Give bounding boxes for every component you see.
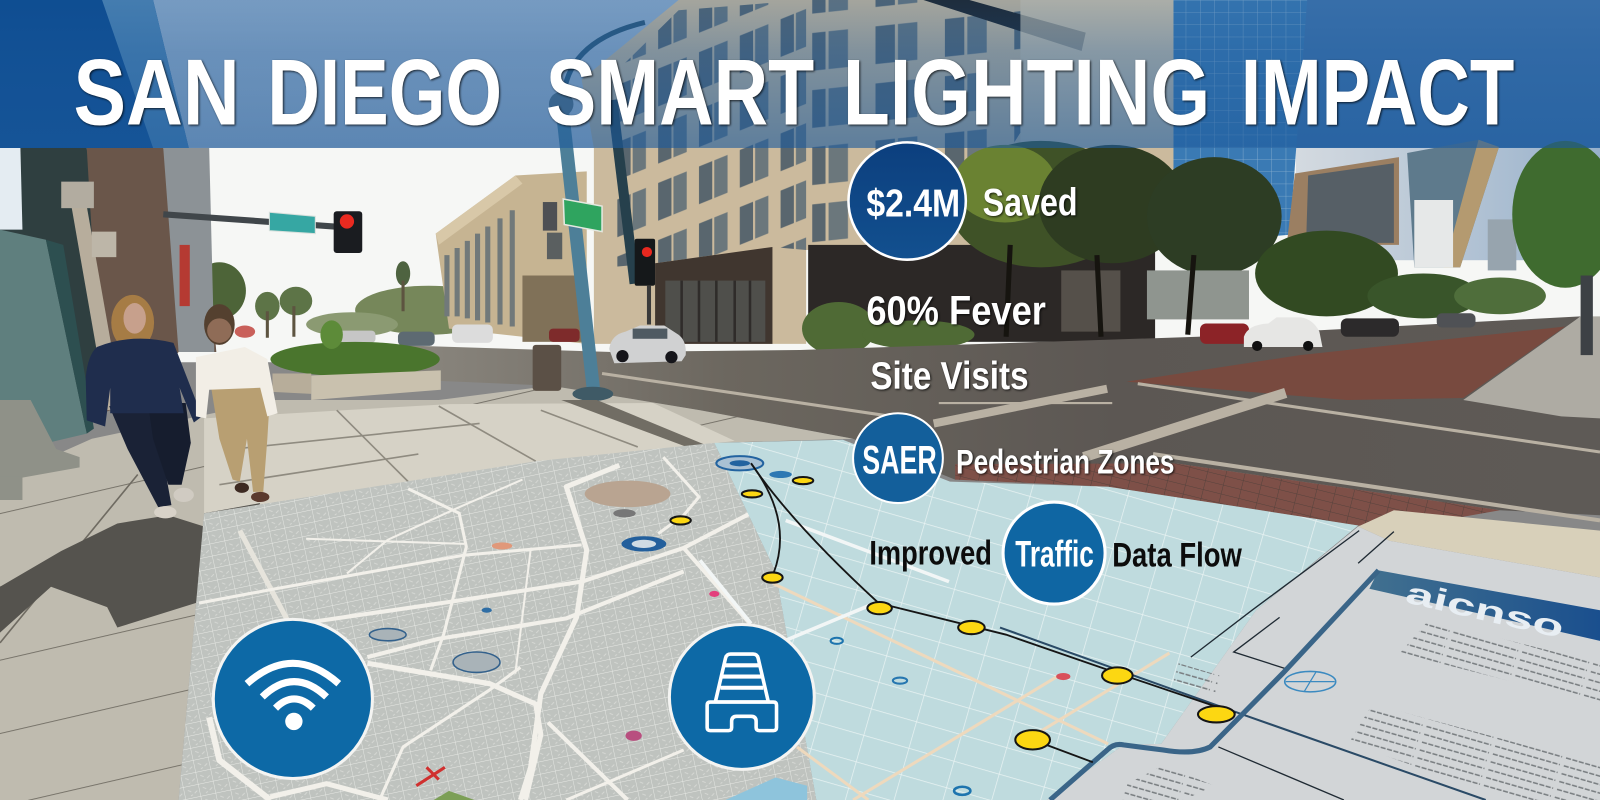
sensor network route xyxy=(751,463,1236,762)
yellow route markers xyxy=(670,477,1235,749)
stat: pedestrian zones: SAER xyxy=(862,438,937,482)
title: SAN xyxy=(73,39,240,144)
stat: improved traffic data flow: Data Flow xyxy=(1112,536,1243,574)
column base at left xyxy=(0,400,80,500)
brick crossing lower xyxy=(955,463,1500,527)
stat: pedestrian zones xyxy=(853,413,1174,503)
stat: site visits: Site Visits xyxy=(870,355,1029,398)
brick crossing upper xyxy=(1127,327,1565,400)
woman in white top xyxy=(196,304,278,502)
distant cars xyxy=(339,324,580,346)
street map: teal district xyxy=(700,440,1358,800)
glass tower xyxy=(1162,0,1307,245)
title: IMPACT xyxy=(1241,39,1514,144)
hub marker xyxy=(716,456,792,478)
pavement xyxy=(0,386,853,800)
title: SMART xyxy=(546,39,814,144)
dark signal pole xyxy=(612,100,635,284)
street trees xyxy=(949,141,1282,337)
main office building xyxy=(582,0,1173,344)
woman in navy top xyxy=(86,295,202,518)
icon: structure tower xyxy=(669,624,814,769)
planter with shrubs xyxy=(270,320,441,400)
icon: wifi xyxy=(213,619,372,779)
left building xyxy=(0,0,216,454)
right buildings xyxy=(1287,140,1516,270)
stat: $2.4M saved: Saved xyxy=(983,181,1078,224)
red traffic signal on pole xyxy=(635,239,655,324)
title band xyxy=(0,0,1600,148)
road xyxy=(388,316,1600,515)
right tree rows xyxy=(1255,141,1600,318)
sky above horizon xyxy=(0,0,1600,362)
silver car centre xyxy=(609,326,686,363)
stat: improved traffic data flow xyxy=(869,502,1243,604)
stat: 60% fever: 60% Fever xyxy=(866,287,1046,333)
title xyxy=(73,39,1514,144)
lamp shadow xyxy=(561,400,740,459)
stat: pedestrian zones: Pedestrian Zones xyxy=(956,443,1174,481)
printed information sheet xyxy=(1000,510,1600,800)
bollard xyxy=(533,345,561,391)
stat: improved traffic data flow: Improved xyxy=(869,534,992,572)
right kerb sidewalk xyxy=(1463,316,1600,418)
stat: $2.4M saved xyxy=(848,142,1078,260)
lamp post xyxy=(549,22,645,401)
title: LIGHTING xyxy=(843,39,1210,144)
parked cars xyxy=(1200,313,1476,351)
stat: $2.4M saved: $2.4M xyxy=(866,182,960,225)
crosswalk bars xyxy=(602,373,1600,520)
green street sign xyxy=(563,199,602,232)
distant tree-lined street xyxy=(193,261,502,338)
stat: improved traffic data flow: Traffic xyxy=(1015,533,1094,574)
far-right pole xyxy=(1581,276,1593,355)
shrubs below office xyxy=(802,302,974,355)
street map: grey district xyxy=(179,443,816,800)
bright paving slabs near crossing xyxy=(0,403,735,643)
traffic signal arm xyxy=(163,211,362,253)
sheet heading text: aicnso xyxy=(1403,576,1567,645)
title: DIEGO xyxy=(267,39,502,144)
people shadow xyxy=(0,503,281,633)
mid-distance tan building xyxy=(436,171,587,344)
